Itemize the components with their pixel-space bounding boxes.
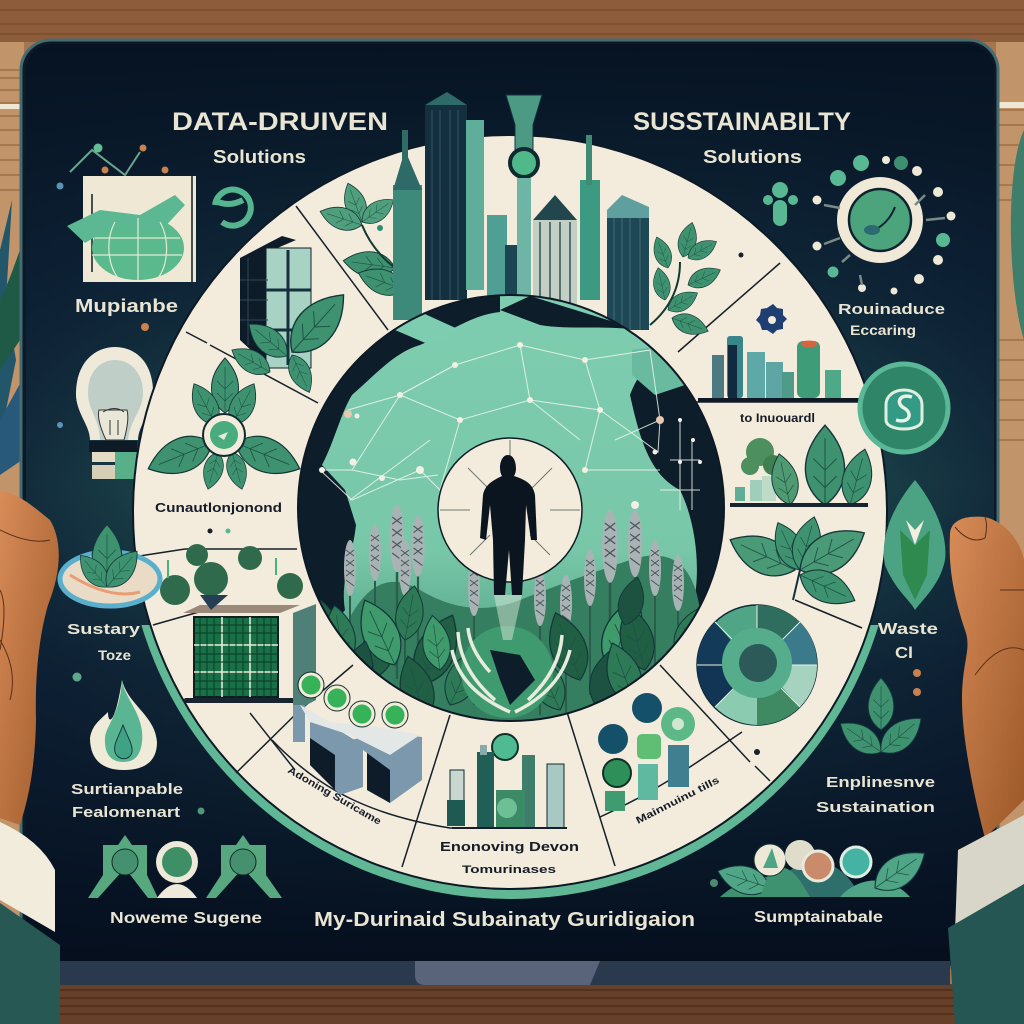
label: surtianpable: [71, 781, 204, 821]
segment: plants on shelf: [730, 425, 879, 509]
label: enplinesnve: Sustaination: [816, 799, 935, 816]
segment: data tower with leaves: [226, 236, 358, 397]
label: engnouring devon: Enonoving Devon: [440, 839, 579, 854]
label: adoning suricame: Adoning Suricame: [286, 765, 383, 828]
label: to inuouardl: to Inuouardl: [740, 411, 815, 425]
spokes: [133, 206, 865, 867]
label: sustary toze: [67, 621, 141, 663]
segment: bar chart: [698, 304, 863, 402]
label: cunautlonjonond: Cunautlonjonond: [155, 500, 282, 515]
heading: data-driven: Solutions: [213, 147, 306, 167]
label: rouinaduce: Eccaring: [850, 322, 916, 338]
label: sustary toze: Sustary: [67, 621, 141, 638]
icon: small bulb-node: [763, 182, 798, 226]
main cream circle: [133, 135, 887, 889]
segment: towers bottom: [447, 734, 567, 829]
heading: data-driven: [172, 108, 388, 167]
icon: light bulb: [57, 323, 153, 479]
label: surtianpable: Surtianpable: [71, 781, 183, 798]
label: waste: Waste: [878, 621, 938, 638]
segment: solar panel board: [160, 528, 316, 712]
big leaves: [320, 576, 698, 711]
globe: [290, 290, 730, 730]
right sleeve: [948, 884, 1024, 1024]
segment: icons and cards lower-right: [598, 693, 760, 811]
figure silhouette: [480, 455, 537, 595]
label: waste: [878, 621, 938, 662]
segment: vine leaves upper-right: [649, 220, 744, 340]
small globe with rings: [452, 626, 570, 718]
label: noweme sugene: Noweme Sugene: [110, 910, 262, 927]
label: engnouring devon: [440, 839, 579, 876]
heading: sustainability: [633, 108, 851, 167]
segment: leaves with badge: [142, 358, 306, 492]
left hand: [0, 492, 59, 825]
hills: [340, 556, 700, 730]
label: sustary toze: Toze: [98, 647, 131, 663]
label: engnouring devon: Tomurinases: [462, 864, 556, 876]
label: waste: Cl: [895, 645, 913, 662]
icon: green leaf shield: [884, 480, 945, 610]
heading: sustainability: Solutions: [703, 147, 802, 167]
icon: dial with dots: [763, 155, 956, 294]
icon: plate leaf: [60, 524, 160, 606]
icon: triple badges: [88, 835, 282, 898]
icon: map chart card: [56, 144, 251, 282]
right hand: [950, 517, 1024, 838]
left cuff: [0, 822, 55, 932]
footer title: My-Durinaid Subainaty Guridigaion: [314, 909, 695, 931]
right cuff: [955, 815, 1024, 932]
wheat stalks: [344, 505, 684, 720]
label: enplinesnve: [816, 774, 935, 816]
heading: data-driven: DATA-DRUIVEN: [172, 108, 388, 136]
label: mupianbe: Mupianbe: [75, 296, 178, 316]
icon: trefoil leaves: [833, 669, 929, 762]
label: mainnuinu tills: Mainnuinu tills: [634, 775, 722, 827]
label: rouinaduce: [838, 301, 945, 338]
skyline: [393, 92, 649, 330]
segment: blocks with green badges: [293, 672, 422, 803]
icon: S circle badge: [860, 364, 948, 452]
left sleeve: [0, 903, 60, 1024]
center medallion with figure: [438, 438, 582, 640]
segment: leaf sprig right: [723, 513, 873, 614]
icon: leaves and coins: [710, 840, 933, 901]
network lines: [320, 345, 700, 510]
label: rouinaduce: Rouinaduce: [838, 301, 945, 318]
main circle ring: [141, 625, 879, 899]
label: sumptainabale: Sumptainabale: [754, 909, 883, 926]
segment: climbing leaves upper-left: [317, 180, 409, 301]
bezel bottom bar: [60, 961, 950, 985]
heading: sustainability: SUSSTAINABILTY: [633, 108, 851, 136]
icon: S mark: [214, 190, 251, 226]
plant behind tablet, right: [1011, 130, 1024, 340]
dark continents: [299, 296, 500, 612]
segment: donut wheel: [697, 605, 817, 725]
plant behind tablet, left: [0, 200, 22, 475]
label: enplinesnve: Enplinesnve: [826, 774, 935, 791]
icon: flame: [72, 672, 157, 770]
label: surtianpable: Fealomenart: [72, 804, 180, 821]
